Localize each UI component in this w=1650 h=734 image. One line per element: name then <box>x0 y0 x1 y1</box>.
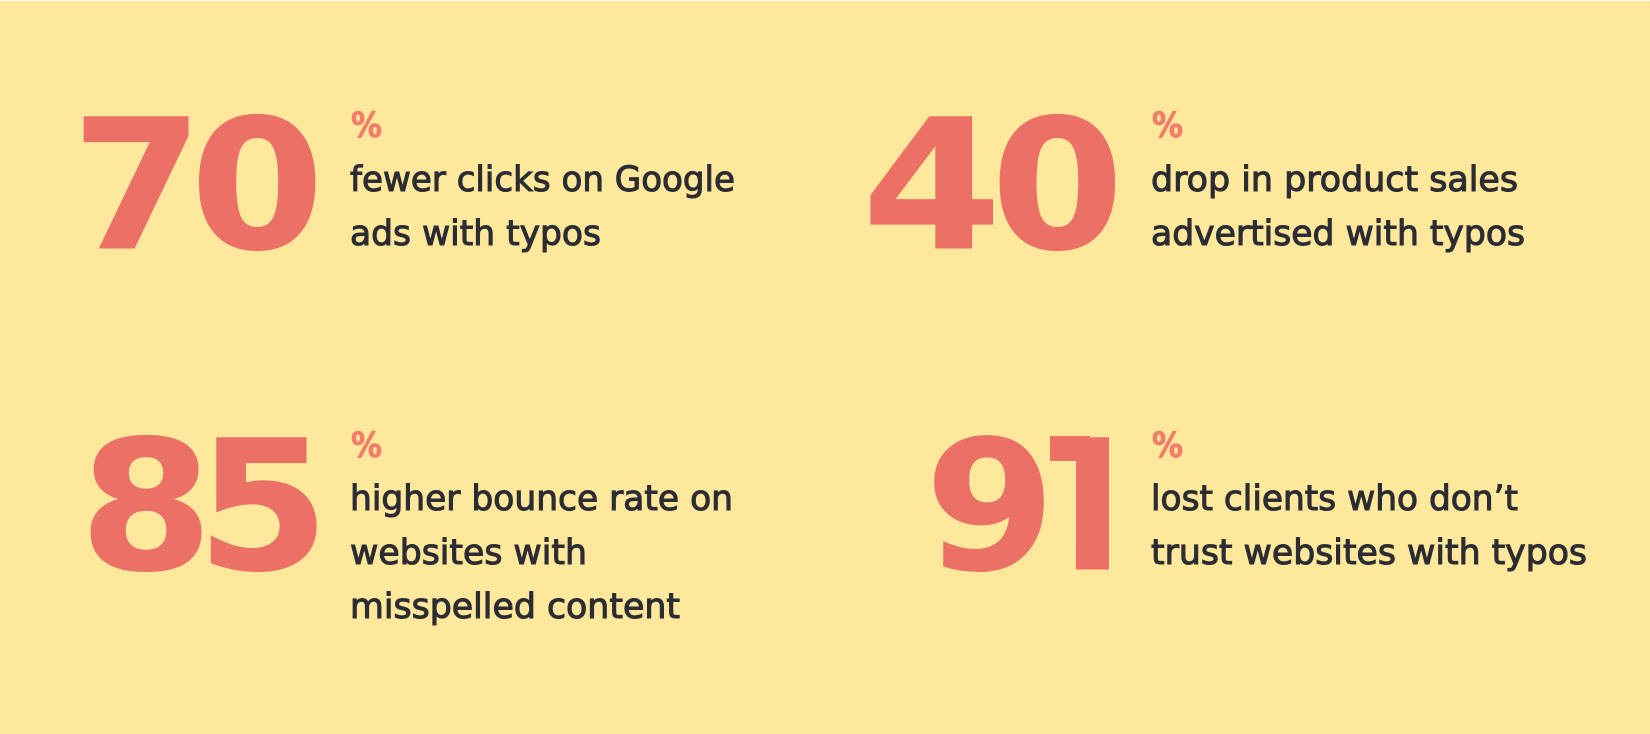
description <box>350 160 735 254</box>
percent sign: % <box>351 106 382 146</box>
description: trust websites with typos <box>1151 533 1587 573</box>
description: lost clients who don’t <box>1151 479 1518 519</box>
description <box>350 479 733 627</box>
big number 70: 0 <box>190 81 324 291</box>
big number 70: 7 <box>72 81 203 291</box>
description: websites with <box>350 533 587 573</box>
panel: 91% lost clients <box>934 430 1586 572</box>
big number 91: 9 <box>925 403 1055 612</box>
big number 85 <box>79 402 329 612</box>
big number 40 <box>862 81 1124 291</box>
percent sign: % <box>1152 106 1183 146</box>
panel: 70% fewer clicks <box>72 81 735 291</box>
description: advertised with typos <box>1151 214 1525 254</box>
description <box>1151 160 1525 254</box>
big number 70 <box>72 81 324 291</box>
big number 91: 1 <box>1026 403 1152 612</box>
description <box>1151 479 1587 573</box>
panel: 85% higher bounce rate <box>79 402 733 627</box>
description: ads with typos <box>350 214 601 254</box>
big number 91 <box>934 435 1109 572</box>
big number 85: 8 <box>79 402 213 612</box>
description: higher bounce rate on <box>350 479 733 519</box>
description: fewer clicks on Google <box>350 160 735 200</box>
percent sign: % <box>1152 426 1183 466</box>
description: misspelled content <box>350 587 680 627</box>
panel: 40% drop in sales <box>862 81 1525 291</box>
description: drop in product sales <box>1151 160 1518 200</box>
big number 40: 4 <box>862 81 1002 290</box>
big number 85: 5 <box>197 402 329 612</box>
big number 40: 0 <box>991 81 1124 291</box>
percent sign: % <box>351 426 382 466</box>
